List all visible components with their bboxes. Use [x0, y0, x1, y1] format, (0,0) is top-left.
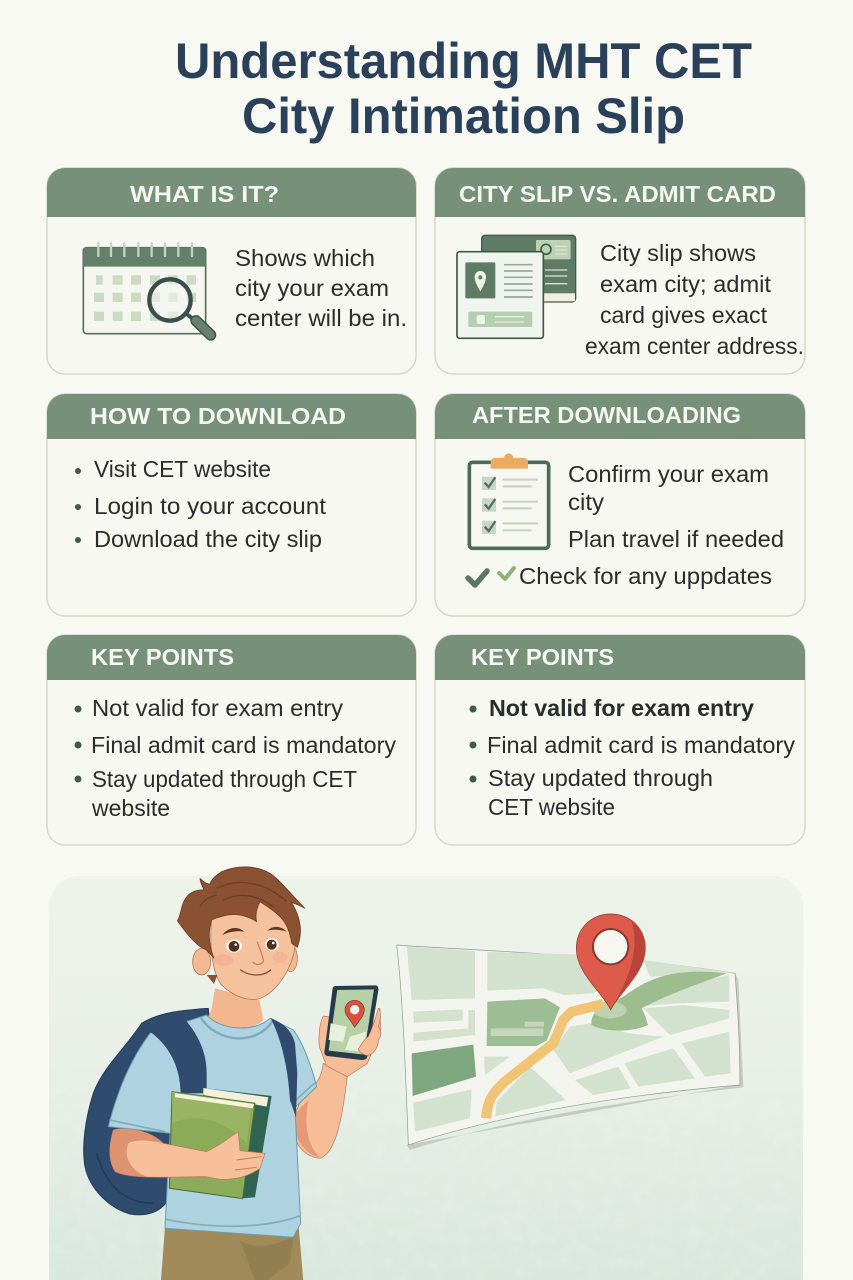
- list: key points left: Final admit card is mandatory: [91, 732, 396, 758]
- list: key points left: [74, 695, 396, 821]
- text: city slip vs admit card: [585, 240, 804, 359]
- heading: key points right: KEY POINTS: [471, 644, 614, 670]
- icon: calendar with magnifier: [83, 243, 211, 335]
- heading: city slip vs admit card: CITY SLIP VS. ADMIT CARD: [459, 181, 776, 207]
- text: after downloading steps: city: [568, 489, 605, 515]
- illustration: city map with pin: [397, 914, 743, 1150]
- panel: key points right: [435, 635, 805, 845]
- heading: what is it: WHAT IS IT?: [130, 181, 279, 207]
- heading: key points left: KEY POINTS: [91, 644, 234, 670]
- text: what is it: center will be in.: [235, 305, 407, 331]
- title: City Intimation Slip: [242, 88, 685, 144]
- list: key points right: Not valid for exam entry: [489, 695, 754, 721]
- title: [175, 33, 752, 144]
- right arm holding phone: [292, 1063, 347, 1158]
- neck: [208, 988, 263, 1028]
- panel: how to download: [47, 394, 416, 616]
- map blocks: [407, 947, 733, 1132]
- icon: check marks: [468, 568, 514, 585]
- ears: [193, 948, 211, 975]
- backpack: [84, 1008, 213, 1215]
- text: after downloading steps: Plan travel if needed: [568, 526, 784, 552]
- text: what is it: city your exam: [235, 275, 389, 301]
- heading: after downloading: AFTER DOWNLOADING: [472, 402, 741, 428]
- panel: illustration background: [49, 876, 803, 1280]
- list: download steps: Visit CET website: [94, 456, 271, 482]
- map pin: [576, 914, 645, 1010]
- text: after downloading steps: [519, 461, 784, 589]
- hand and phone: [319, 1008, 381, 1077]
- text: city slip vs admit card: card gives exact: [600, 302, 768, 328]
- books: [200, 1088, 272, 1198]
- eyebrows: [222, 927, 287, 935]
- panel: key points left: [47, 635, 416, 845]
- text: after downloading steps: Check for any uppdates: [519, 563, 772, 589]
- face: [211, 890, 295, 999]
- list: key points left: Not valid for exam entry: [92, 695, 344, 721]
- list: download steps: [75, 456, 327, 552]
- list: download steps: Download the city slip: [94, 526, 322, 552]
- text: what is it: [235, 245, 407, 331]
- list: key points left: website: [91, 795, 170, 821]
- icon: clipboard checklist: [469, 453, 549, 548]
- text: what is it: Shows which: [235, 245, 375, 271]
- panel: after downloading: [435, 394, 805, 616]
- eyes: [226, 939, 242, 953]
- text: city slip vs admit card: exam city; admit: [600, 271, 772, 297]
- hair: [177, 867, 305, 958]
- list: download steps: Login to your account: [94, 493, 327, 519]
- left arm holding books: [110, 1129, 265, 1179]
- t-shirt: [108, 1015, 317, 1237]
- text: city slip vs admit card: exam center address.: [585, 333, 804, 359]
- route: [486, 1004, 603, 1118]
- list: key points right: CET website: [488, 794, 615, 820]
- icon: slip and admit card: [457, 235, 576, 338]
- text: after downloading steps: Confirm your exam: [568, 461, 769, 487]
- list: key points right: Stay updated through: [488, 765, 713, 791]
- text: city slip vs admit card: City slip shows: [600, 240, 756, 266]
- list: key points right: Final admit card is mandatory: [487, 732, 795, 758]
- backpack straps: [150, 1019, 207, 1093]
- trousers: [161, 1227, 303, 1280]
- illustration: student with backpack, books and phone: [84, 867, 381, 1280]
- nose and mouth: [253, 942, 263, 965]
- panel: what is it: [47, 168, 416, 374]
- list: key points left: Stay updated through CET: [92, 766, 357, 792]
- heading: how to download: HOW TO DOWNLOAD: [90, 403, 346, 429]
- panel: city slip vs admit card: [435, 168, 805, 374]
- title: Understanding MHT CET: [175, 33, 752, 89]
- list: key points right: [470, 695, 795, 820]
